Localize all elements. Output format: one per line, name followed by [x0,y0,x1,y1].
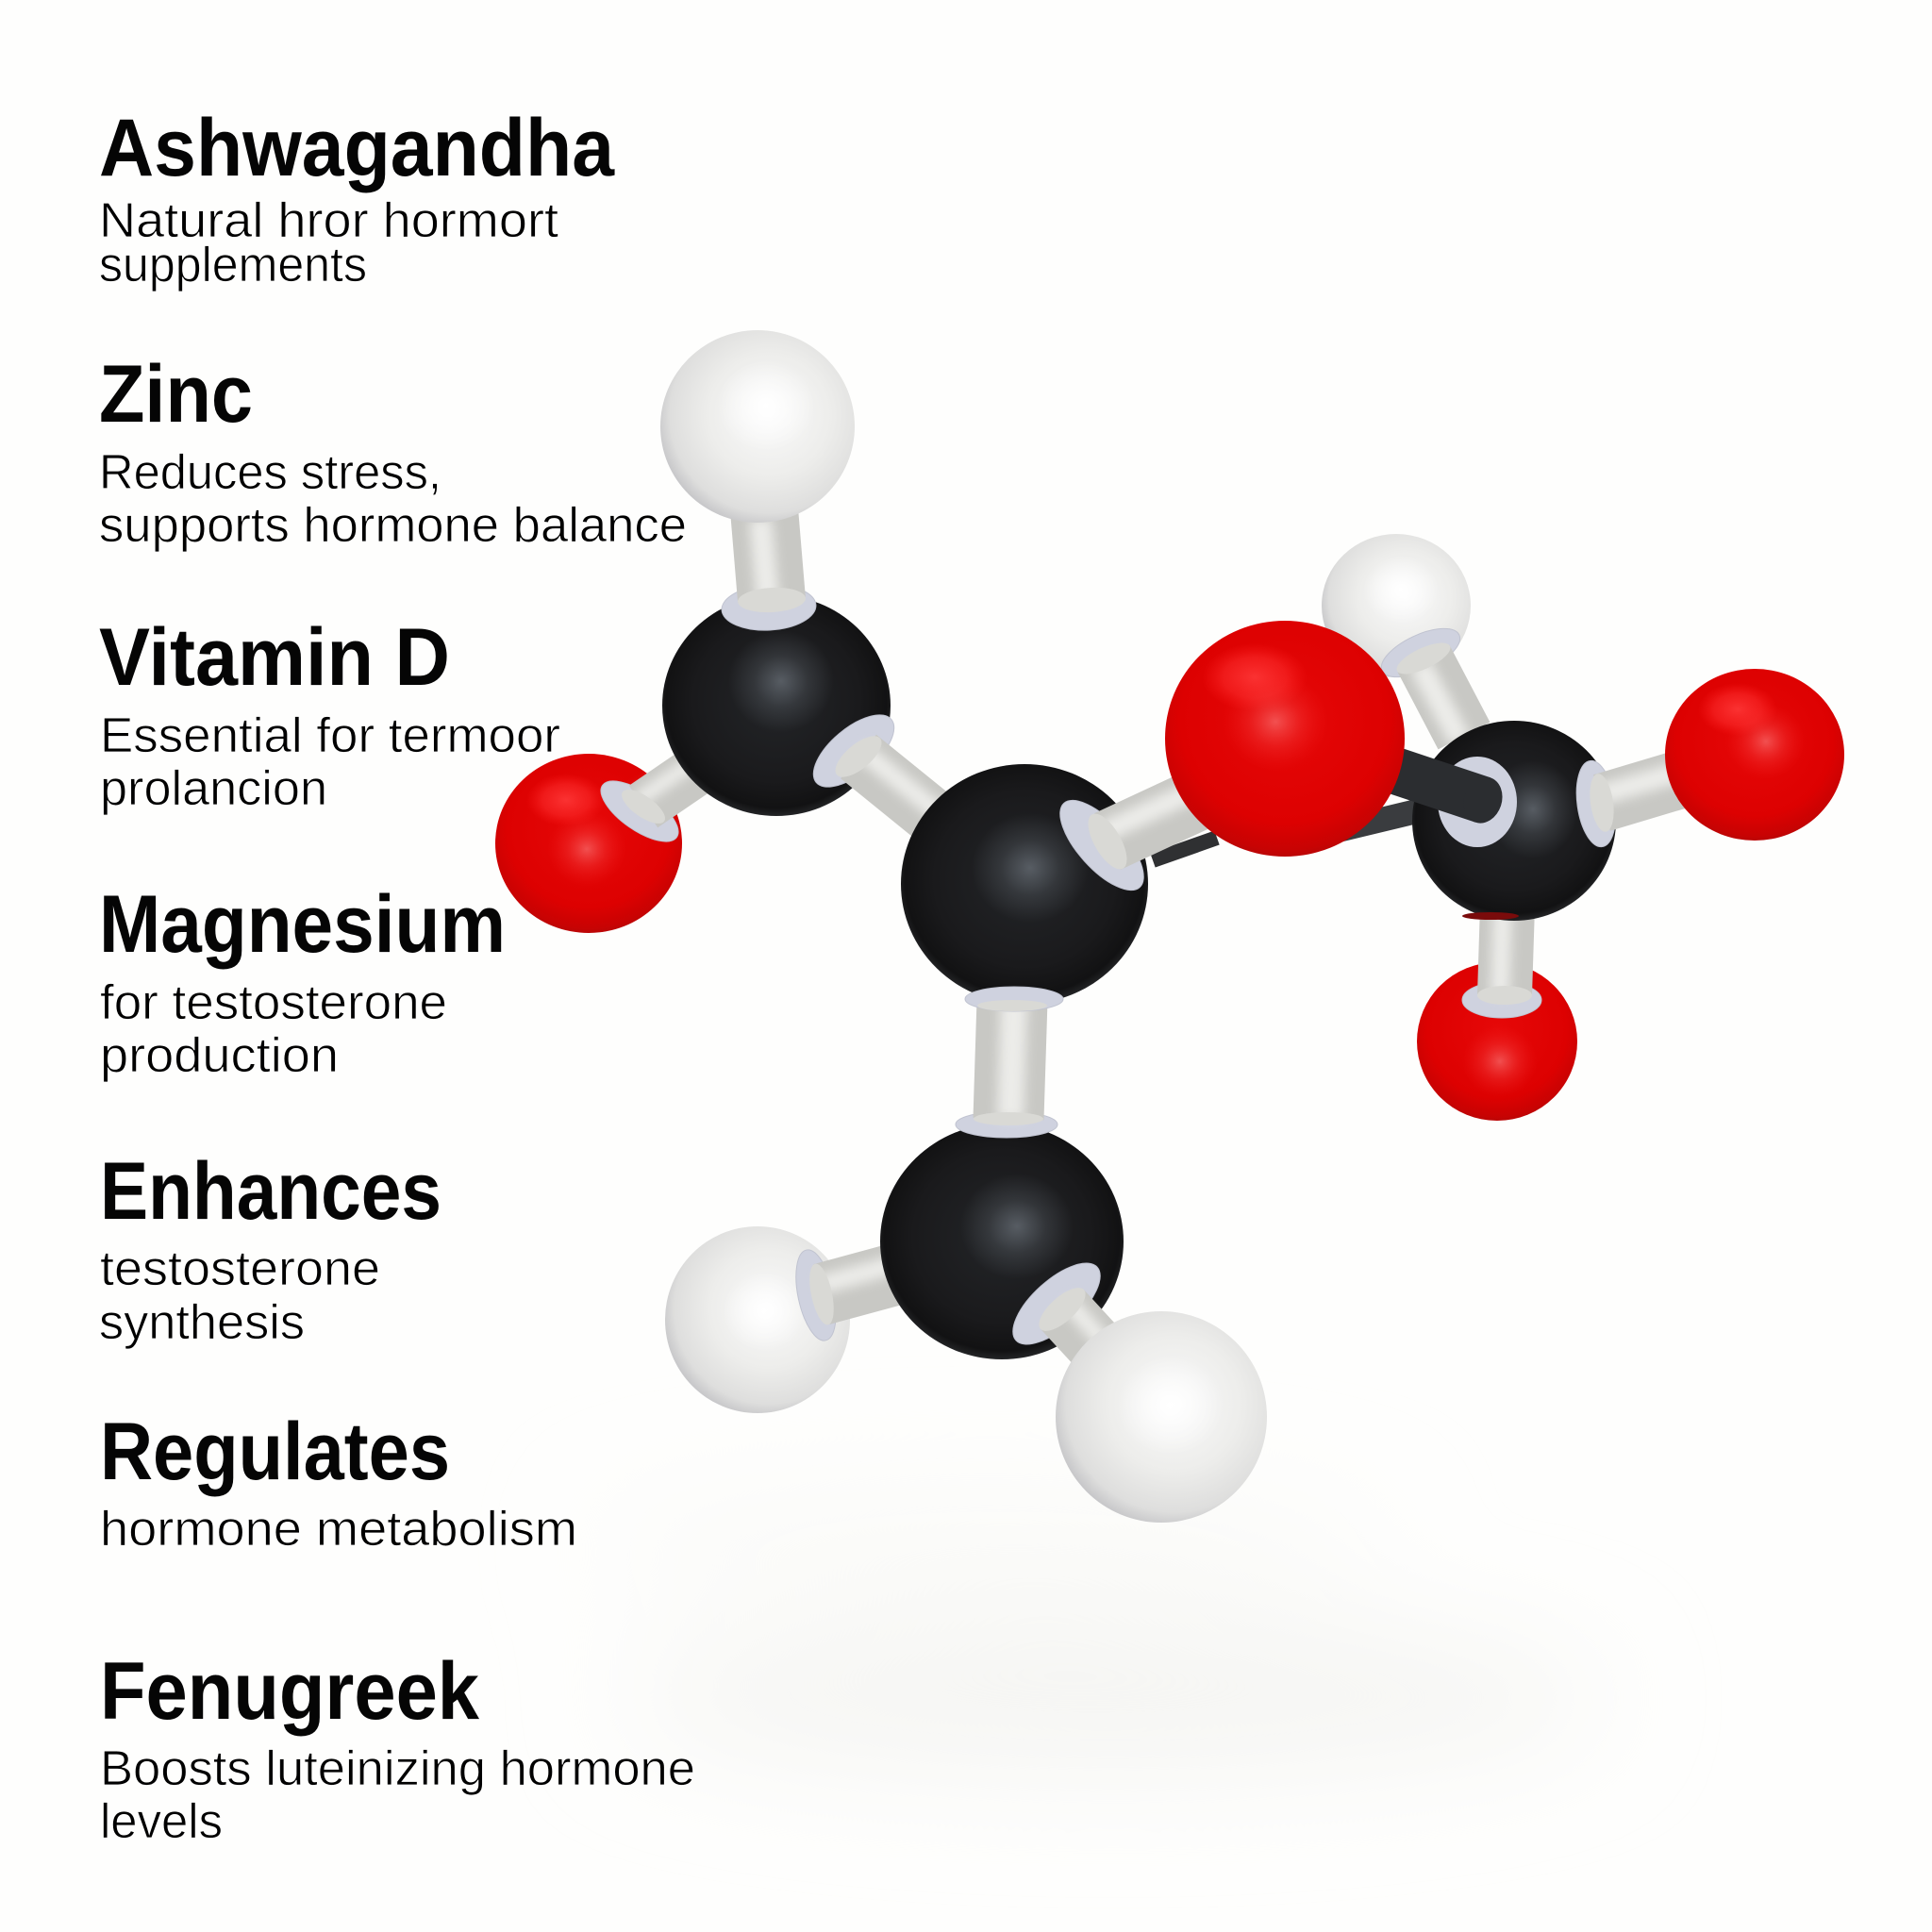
description: Zinc [99,445,687,553]
bond: upper carbon to central carbon [802,702,947,825]
ingredient: Enhances [99,1146,441,1350]
description: Vitamin D: prolancion [100,761,327,816]
ingredient: Zinc [99,349,687,553]
description: Fenugreek [100,1741,695,1849]
collar: central carbon lower bond [965,987,1063,1011]
floor shadow [594,1491,1604,1774]
dark rear bonds [1153,809,1424,860]
atom: central carbon [901,764,1148,1004]
description: Zinc: Reduces stress, [99,445,441,500]
ingredient: Fenugreek [100,1646,695,1849]
bond: upper hydrogen to upper carbon [721,509,817,633]
ingredient: Ashwagandha [99,103,615,292]
heading: Enhances: Enhances [100,1146,441,1237]
atom: lower-left hydrogen [665,1226,850,1413]
description: Fenugreek: levels [100,1794,223,1849]
description: Vitamin D [100,708,560,816]
atom: lower carbon [880,1124,1124,1359]
description: Enhances: synthesis [99,1295,305,1350]
description: Regulates: hormone metabolism [100,1502,577,1557]
ingredient: Magnesium [99,879,506,1083]
bond: left oxygen to upper carbon [591,758,703,853]
bond: right carbon to bottom oxygen [1462,906,1541,1018]
heading: Ashwagandha: Ashwagandha [99,103,615,193]
bond: lower carbon to lower-right hydrogen [1000,1250,1124,1370]
description: Enhances [99,1241,380,1350]
atom: left oxygen [495,754,682,933]
ingredient: Vitamin D [99,612,560,816]
description: Magnesium: for testosterone [100,975,447,1030]
atom: upper carbon [662,595,891,816]
heading: Zinc: Zinc [99,349,253,440]
bond: rear hydrogen to right carbon [1374,619,1467,741]
description: Fenugreek: Boosts luteinizing hormone [100,1741,695,1796]
ingredient: Regulates [100,1407,577,1557]
description: Magnesium: production [100,1028,339,1083]
description: Ashwagandha: Natural hror hormort [99,193,559,248]
heading: Fenugreek: Fenugreek [100,1646,479,1737]
heading: Vitamin D: Vitamin D [99,612,450,703]
bond: lower carbon to lower-left hydrogen [789,1246,898,1344]
description: Zinc: supports hormone balance [99,498,687,553]
bond: central carbon to lower carbon [956,1000,1058,1138]
description: Ashwagandha: supplements [99,238,367,292]
molecule model [495,330,1844,1523]
atom: bottom oxygen [1417,962,1577,1121]
description: Enhances: testosterone [100,1241,380,1296]
ingredient list [99,103,695,1849]
atom: lower-right hydrogen [1056,1311,1267,1523]
heading: Magnesium: Magnesium [99,879,506,970]
bond: right carbon to right oxygen [1572,758,1684,849]
bond: dark bond to right carbon [1358,757,1517,847]
description: Magnesium [100,975,447,1083]
bond: central carbon to front oxygen [1046,782,1217,903]
heading: Regulates: Regulates [100,1407,450,1497]
atom: right carbon [1412,721,1616,921]
description: Vitamin D: Essential for termoor [100,708,560,763]
description: Ashwagandha [99,193,559,292]
atom: front oxygen [1165,621,1405,857]
atom: right oxygen [1665,669,1844,841]
atom: upper hydrogen [660,330,855,523]
atom: rear hydrogen [1322,534,1471,677]
